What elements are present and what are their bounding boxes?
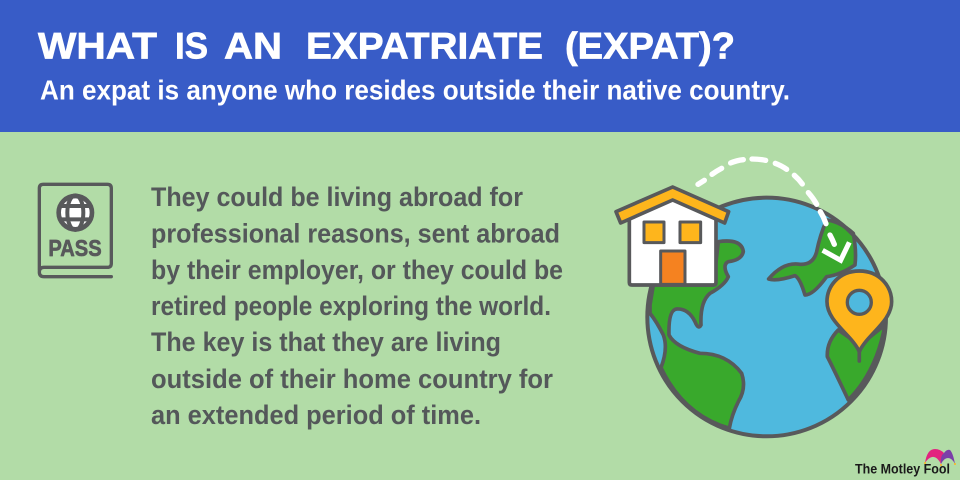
body text: They could be living abroad for	[151, 182, 523, 212]
land: north-west continent	[650, 241, 744, 428]
jester hat	[924, 449, 956, 466]
door	[661, 251, 685, 284]
logo: The Motley Fool	[855, 449, 956, 476]
title: (EXPAT)?	[565, 26, 735, 66]
land: north-east continent	[769, 220, 856, 295]
title: AN	[224, 26, 282, 66]
body text: an extended period of time.	[151, 400, 481, 430]
header banner	[0, 0, 960, 132]
globe	[647, 198, 886, 436]
logo wordmark: The Motley Fool	[855, 462, 950, 476]
title: EXPATRIATE	[306, 26, 543, 66]
passport label: PASS	[48, 235, 102, 261]
body text	[151, 182, 563, 430]
body text: by their employer, or they could be	[151, 255, 563, 285]
body text: The key is that they are living	[151, 327, 501, 357]
check mark	[823, 242, 849, 260]
land: south-east continent	[827, 325, 885, 400]
body text: outside of their home country for	[151, 364, 553, 394]
illustration: globe with house, pin and route	[616, 159, 892, 436]
body text: retired people exploring the world.	[151, 291, 551, 321]
title: WHAT	[38, 26, 157, 66]
globe outline	[647, 198, 886, 436]
icon: passport	[39, 184, 111, 277]
body text: professional reasons, sent abroad	[151, 218, 560, 248]
title	[38, 26, 735, 66]
windows	[644, 222, 664, 243]
title: IS	[175, 26, 208, 66]
dashed flight route	[698, 159, 834, 244]
map pin	[827, 271, 892, 361]
subtitle: An expat is anyone who resides outside their native country.	[40, 74, 790, 106]
roof	[616, 187, 729, 223]
house	[616, 187, 729, 285]
